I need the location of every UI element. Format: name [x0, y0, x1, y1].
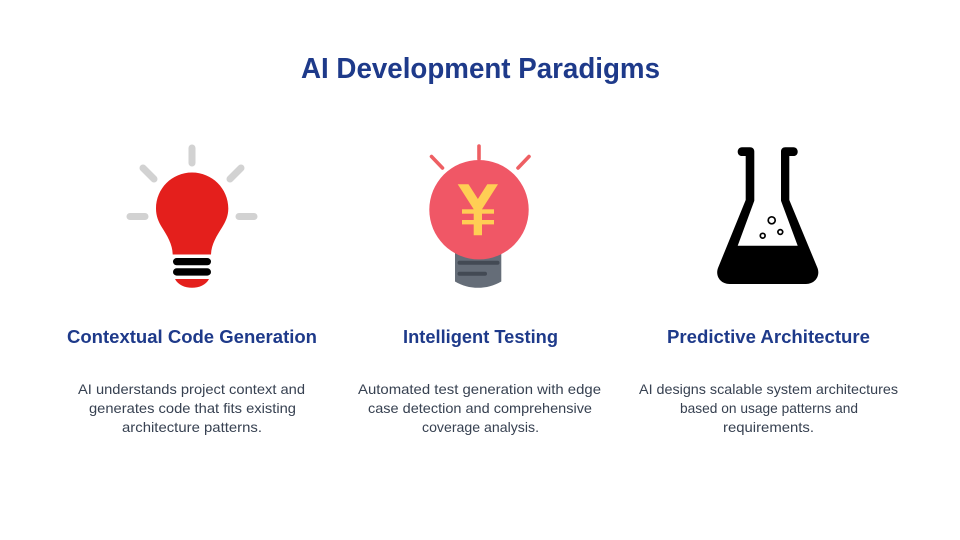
- bulb base: [455, 250, 501, 288]
- title: AI Development Paradigms: [301, 53, 660, 85]
- description: AI understands project context and: [78, 381, 305, 397]
- description: [358, 381, 601, 435]
- base lines: [460, 263, 498, 274]
- description: AI designs scalable system architectures: [639, 381, 898, 397]
- bulb glass: [156, 172, 228, 254]
- panel: predictive architecture: [639, 147, 898, 435]
- bulb base stripes: [173, 258, 211, 276]
- bulb rays: [130, 148, 254, 216]
- yen sign: [458, 184, 498, 235]
- heading: Contextual Code Generation: [67, 327, 317, 347]
- description: based on usage patterns and: [680, 400, 858, 416]
- description: architecture patterns.: [122, 419, 262, 435]
- description: coverage analysis.: [422, 419, 539, 435]
- description: requirements.: [723, 419, 814, 435]
- heading: Predictive Architecture: [667, 327, 870, 347]
- description: generates code that fits existing: [89, 400, 296, 416]
- flask body: [717, 147, 818, 284]
- panel: intelligent testing: [358, 146, 601, 435]
- icon: yen light bulb: [429, 146, 529, 288]
- description: [639, 381, 898, 435]
- bulb tip: [175, 279, 209, 288]
- bubbles: [760, 217, 783, 238]
- heading: Intelligent Testing: [403, 327, 558, 347]
- icon: red light bulb: [130, 148, 254, 288]
- panel: contextual code generation: [67, 148, 317, 435]
- description: [78, 381, 305, 435]
- description: Automated test generation with edge: [358, 381, 601, 397]
- bulb circle: [429, 160, 529, 259]
- description: case detection and comprehensive: [368, 400, 592, 416]
- bulb rays: [432, 146, 529, 168]
- icon: flask: [717, 147, 818, 284]
